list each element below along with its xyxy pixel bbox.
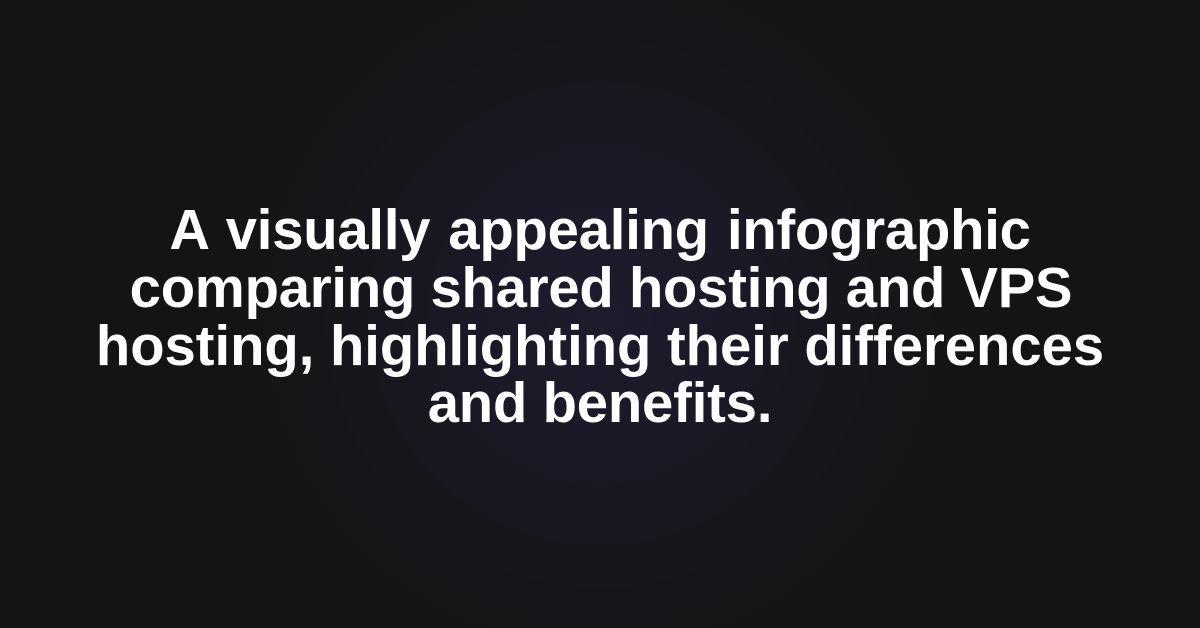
title: A visually appealing infographic bbox=[169, 198, 1031, 261]
title bbox=[96, 198, 1104, 434]
title: comparing shared hosting and VPS bbox=[130, 256, 1072, 319]
title: and benefits. bbox=[428, 371, 772, 434]
title: hosting, highlighting their differences bbox=[96, 314, 1104, 376]
